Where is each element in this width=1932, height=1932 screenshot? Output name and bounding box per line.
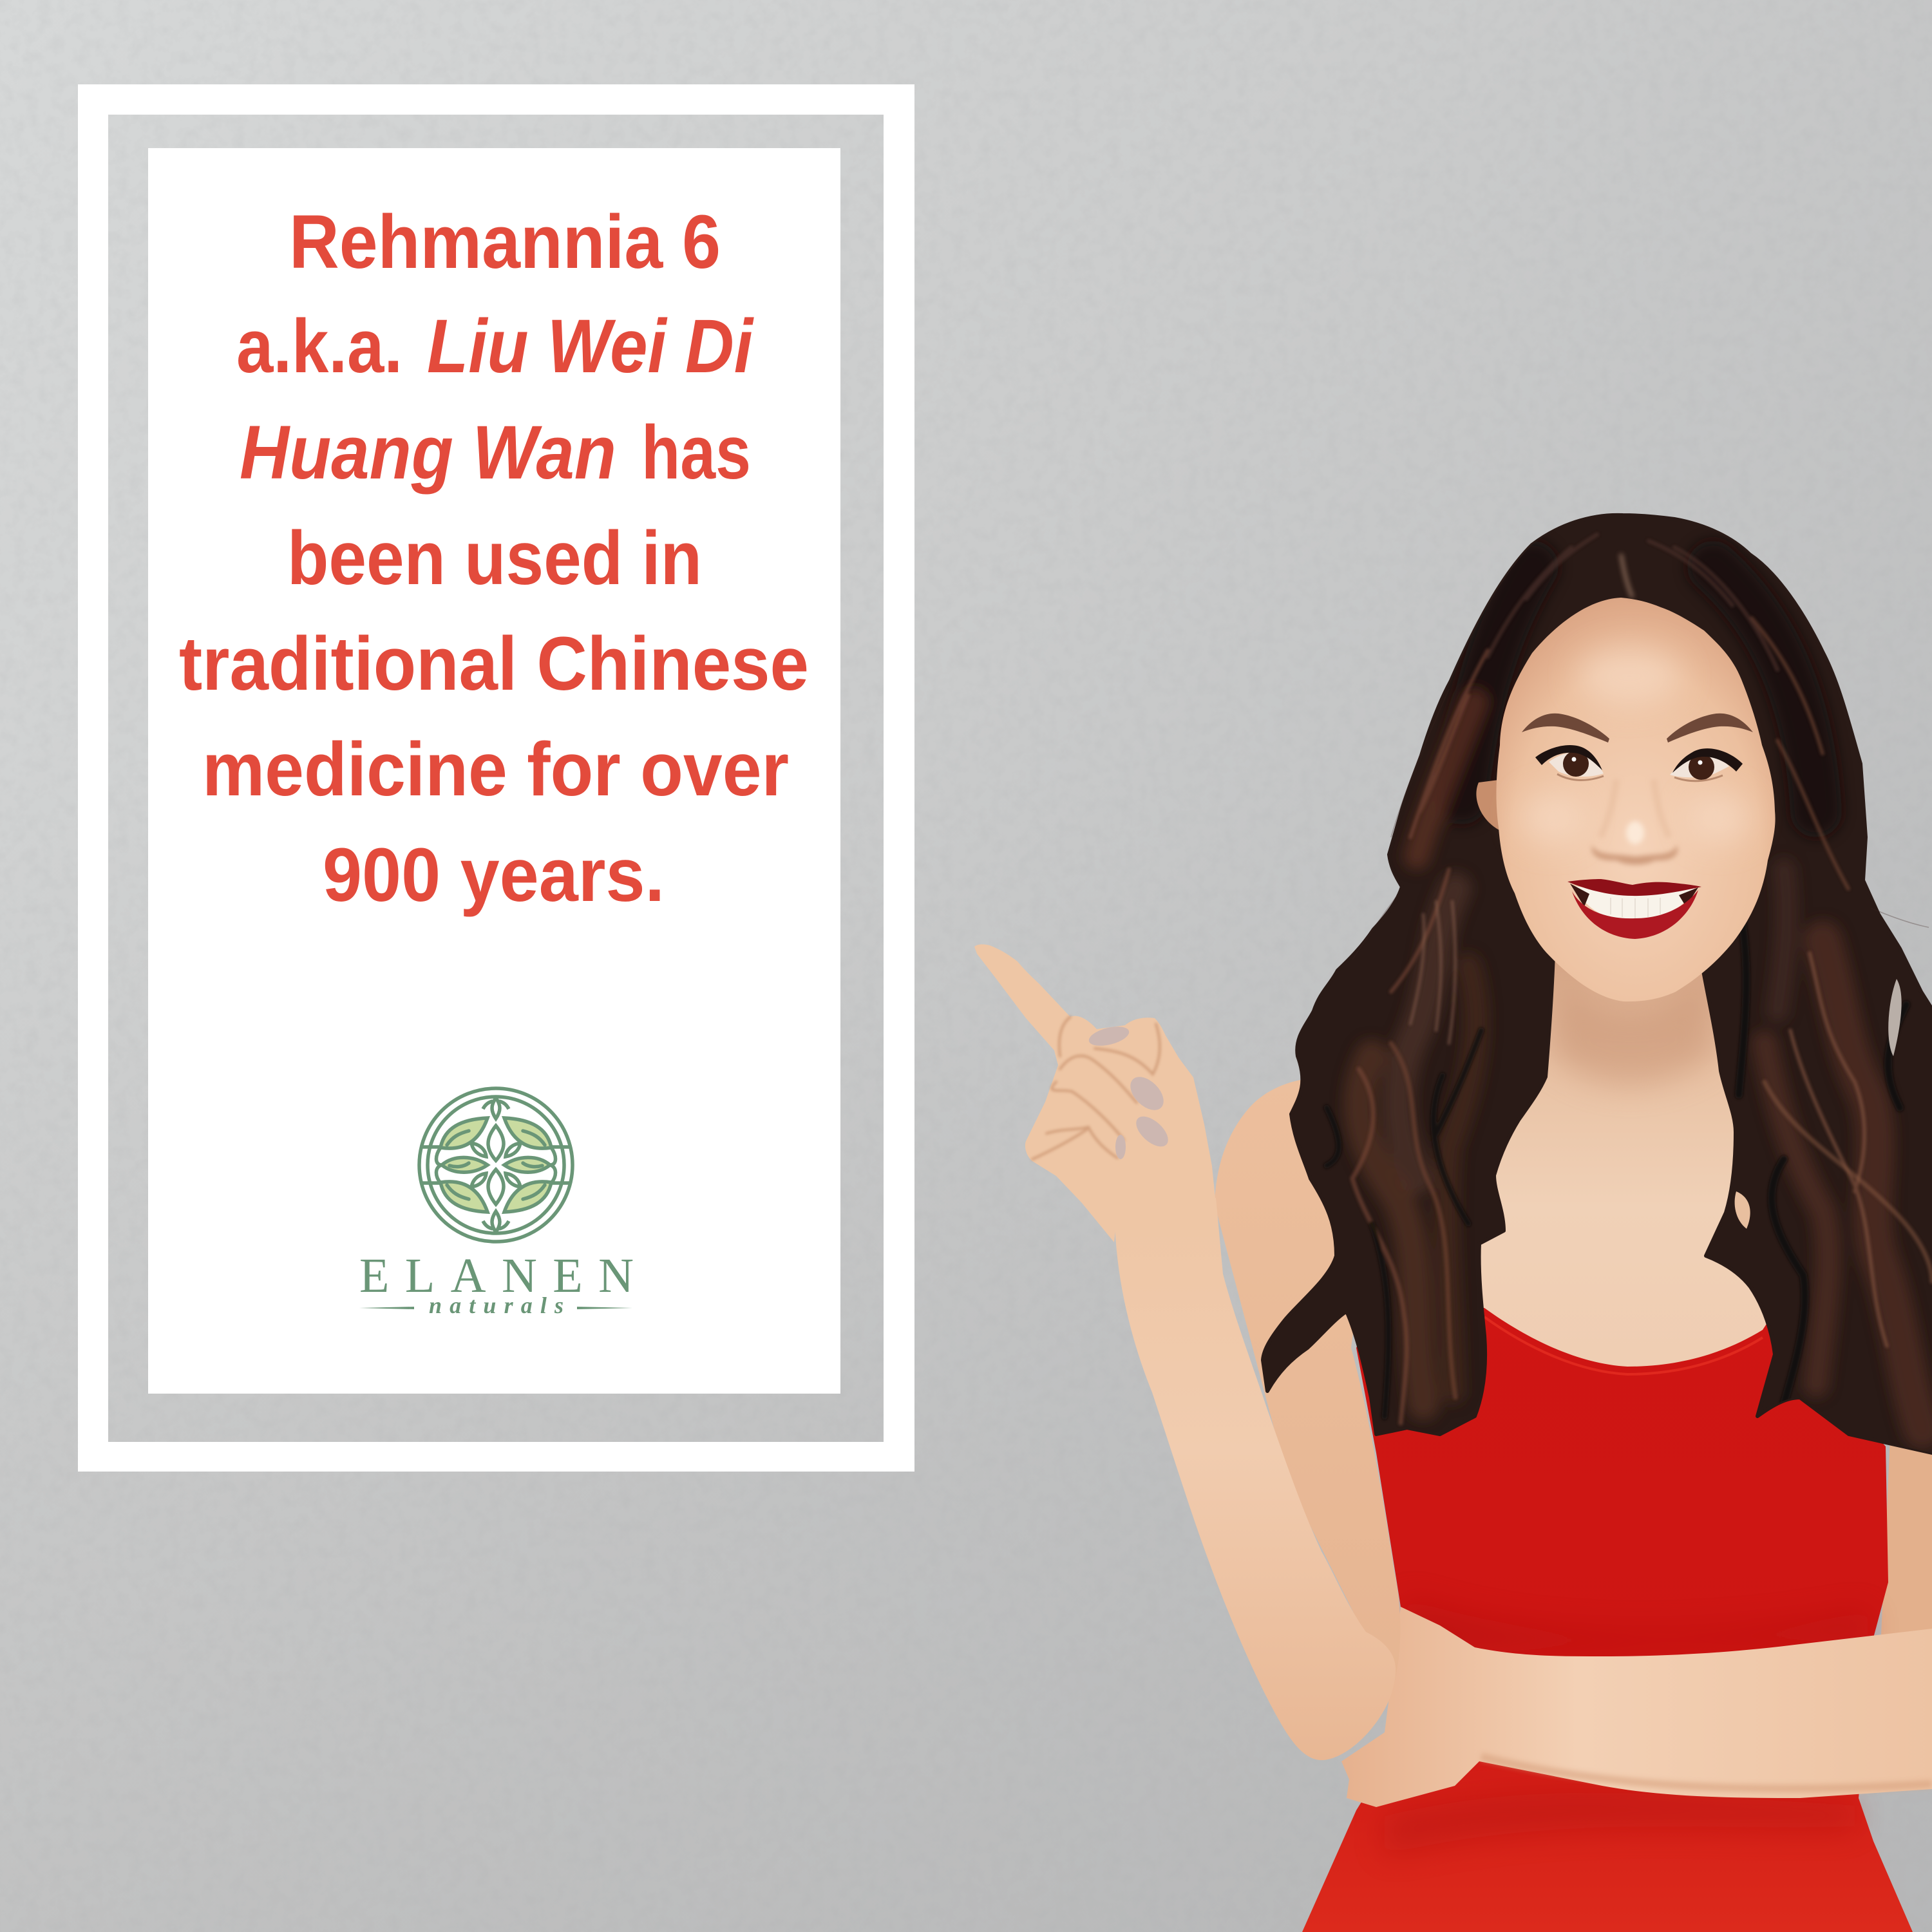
eyebrows — [1522, 714, 1753, 743]
logo: Elanen Naturals — [359, 1088, 634, 1318]
heading: Rehmannia statement text: 900 years. — [323, 833, 665, 918]
eyes — [1535, 745, 1743, 781]
logo tagline: naturals: naturals — [429, 1293, 564, 1318]
heading: Rehmannia statement text — [179, 200, 809, 918]
nose — [1592, 779, 1678, 865]
hand pointing left — [974, 944, 1218, 1242]
body: neck and chest skin — [1475, 927, 1784, 1391]
heading: Rehmannia statement text: a.k.a. — [236, 304, 402, 389]
heading: Rehmannia statement text: Rehmannia 6 — [289, 200, 721, 285]
mouth: red lips and smile — [1567, 879, 1701, 939]
logo wordmark: ELANEN: ELANEN — [359, 1249, 634, 1303]
hair: long wavy dark brown — [1263, 515, 1932, 1453]
heading: Rehmannia statement text: Liu Wei Di — [427, 304, 754, 389]
right arm at far edge — [1880, 1056, 1932, 1649]
hair broad colour shading — [1327, 535, 1932, 1430]
left upper arm and shoulder — [1215, 1077, 1400, 1690]
flyaway hair wisps — [1352, 689, 1929, 960]
heading: Rehmannia statement text: been used in — [287, 516, 702, 601]
heading: Rehmannia statement text: Huang Wan — [240, 410, 616, 495]
panel: white double frame — [78, 84, 914, 1472]
person: smiling woman pointing at the panel — [974, 515, 1932, 1932]
heading: Rehmannia statement text: traditional Chinese — [179, 621, 809, 706]
icon: circular leaf emblem — [419, 1088, 573, 1242]
heading: Rehmannia statement text: has — [641, 410, 751, 495]
logo tagline: naturals — [359, 1293, 632, 1318]
hair parting — [1621, 554, 1633, 598]
heading: Rehmannia statement text: medicine for over — [202, 727, 789, 812]
hair gaps: wall and skin seen between curls — [1735, 979, 1902, 1229]
cheek highlights — [1520, 647, 1752, 844]
face — [1476, 554, 1776, 1001]
nails — [1087, 1023, 1173, 1159]
hair fine strands — [1327, 535, 1932, 1423]
dress: red tank top — [1302, 1066, 1913, 1932]
crossed forearm and hand — [1341, 1607, 1932, 1807]
left forearm from elbow to wrist — [1115, 1198, 1396, 1760]
